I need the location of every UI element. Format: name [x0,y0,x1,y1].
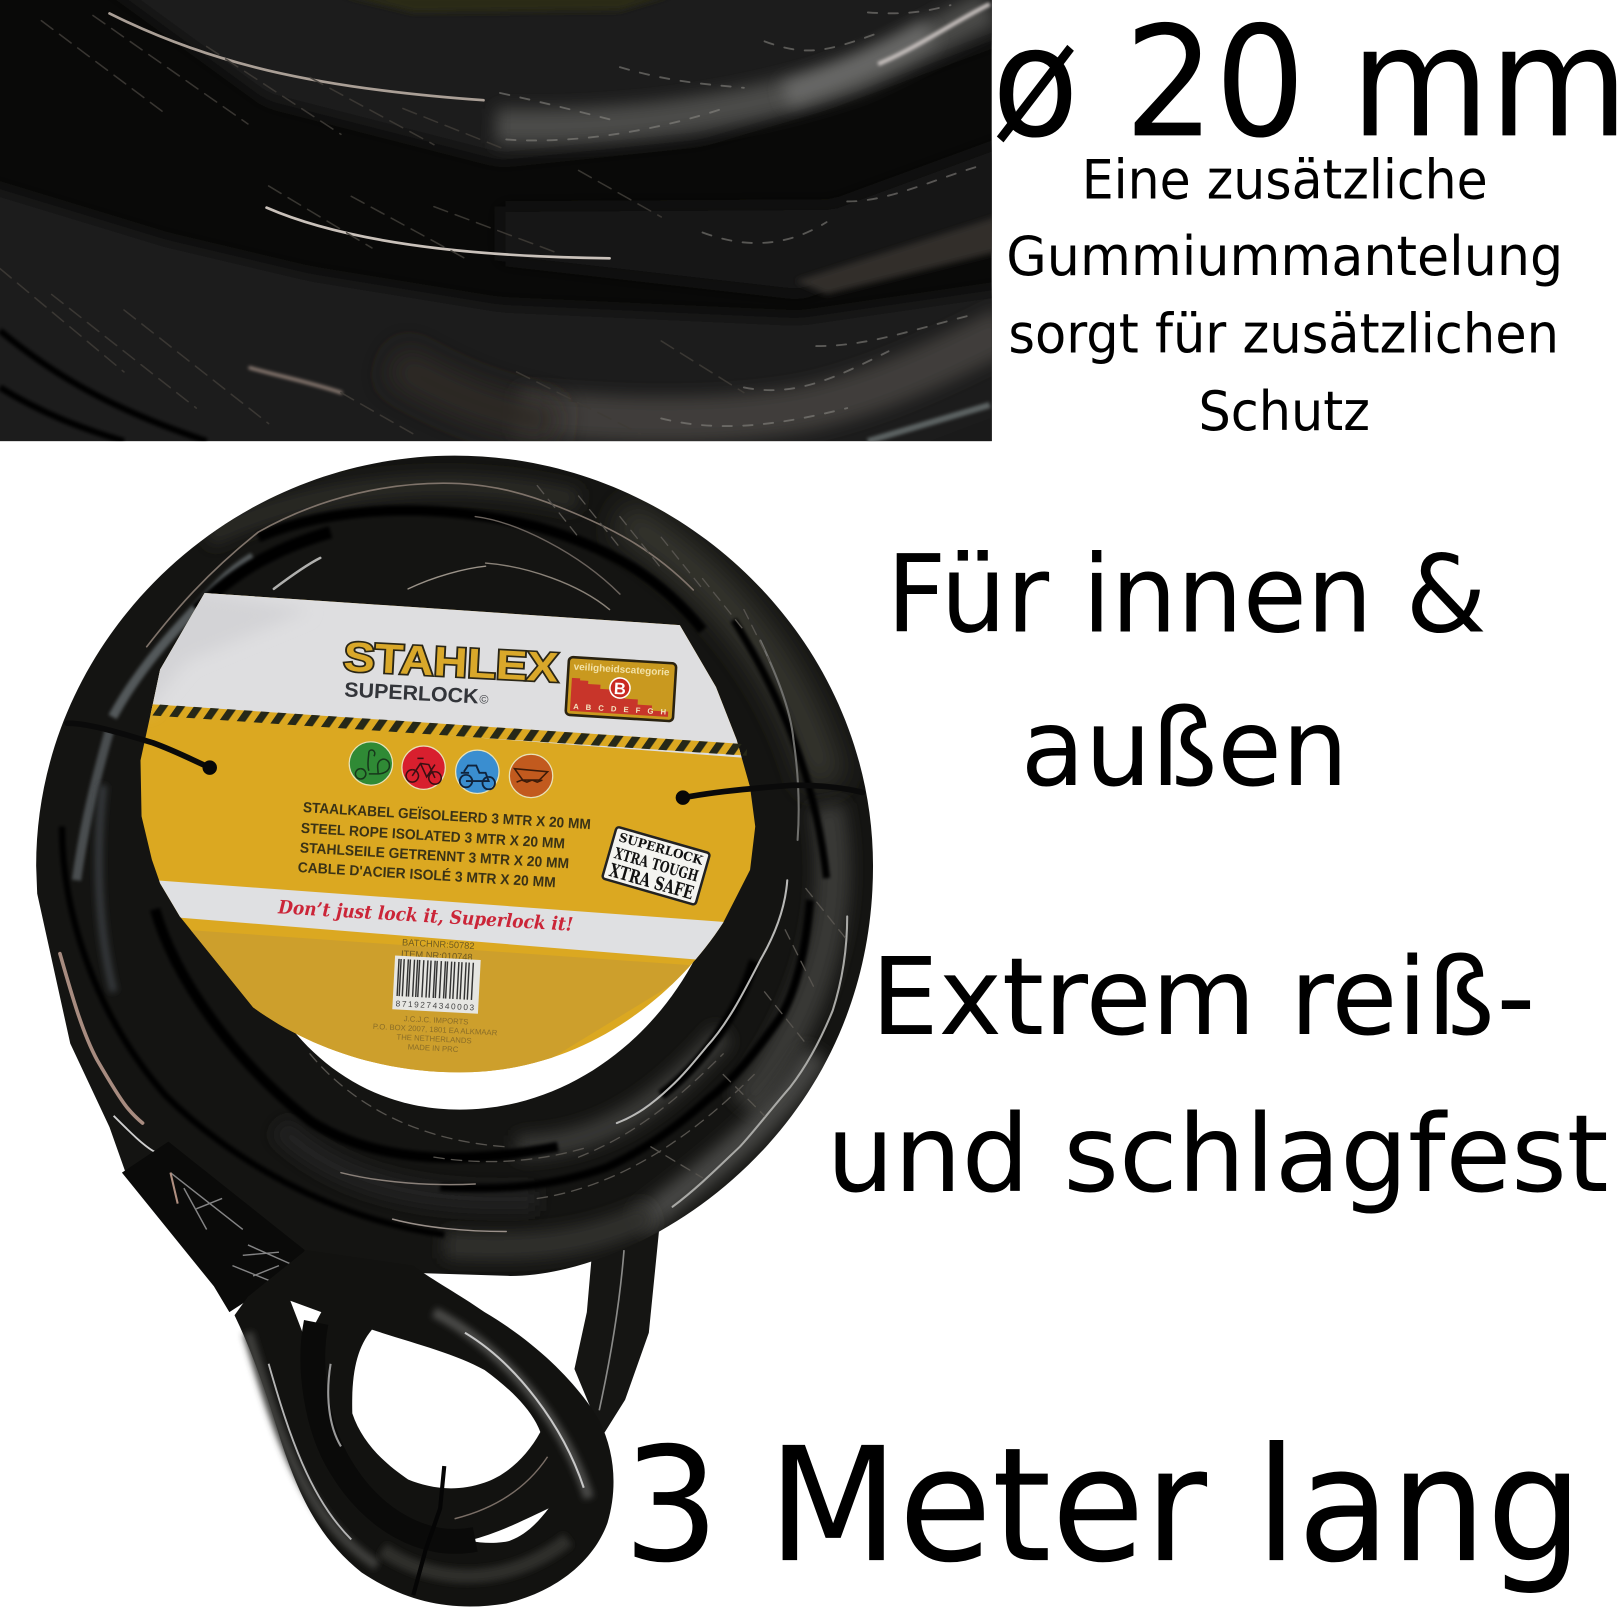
cable: lower loop [235,1250,614,1606]
dark gaps between cable turns [62,510,827,1235]
badge: safety category B: B [613,679,627,699]
text block: rubber sheath description [1006,147,1563,443]
cable tie: left [67,723,217,775]
icons: vehicle categories [349,742,553,798]
text block: rubber sheath description: Eine zusätzliche [1082,147,1488,211]
heading: indoor and outdoor use: Für innen & [886,532,1487,657]
heading: tear and impact resistant: und schlagfest [827,1092,1609,1217]
logo: Stahlex Superlock: SUPERLOCK [344,678,479,708]
highlight: wire strands [0,5,982,434]
badge: safety category B: veiligheidscategorie [573,662,670,679]
batch and item numbers: BATCHNR:50782 [402,937,475,951]
cable: ferrule with tape [122,1142,305,1312]
badge: safety category B: A B C D E F G H [573,702,667,717]
sticker: Superlock Xtra Tough Xtra Safe: XTRA TOUGH [612,843,701,886]
batch and item numbers [401,937,475,962]
importer address [373,1014,498,1054]
text block: product description in four languages: STAHLSEILE GETRENNT 3 MTR X 20 MM [299,840,570,872]
text block: product description in four languages: STEEL ROPE ISOLATED 3 MTR X 20 MM [300,821,565,852]
heading: indoor and outdoor use [886,532,1487,811]
text block: product description in four languages [297,799,591,891]
heading: tear and impact resistant [827,935,1609,1217]
cable tie: right [676,785,863,805]
text block: rubber sheath description: sorgt für zusätzlichen [1008,301,1559,365]
sticker: Superlock Xtra Tough Xtra Safe: SUPERLOCK [617,829,706,868]
heading: indoor and outdoor use: außen [1021,686,1348,811]
cable tie: on lower loop [413,1466,444,1595]
logo: Stahlex Superlock [343,634,560,708]
barcode: 8719274340003 [395,999,475,1012]
panel: close-up photo of rubber-coated cable [0,0,1012,465]
cable: tail behind coil [574,1188,663,1436]
sticker: Superlock Xtra Tough Xtra Safe [602,827,710,906]
slogan: Don’t just lock it, Superlock it! [277,897,574,936]
hazard stripe [153,710,747,750]
hole: white crescent under the label [222,827,728,1110]
heading: cable length: 3 Meter lang [623,1414,1583,1598]
photo: coiled steel cable [36,456,873,1606]
importer address: J.C.J.C. IMPORTS [404,1014,469,1027]
logo: Stahlex Superlock: STAHLEX [343,634,560,691]
highlight: coil strands [60,483,847,1232]
cable: main coil [36,456,873,1276]
text block: rubber sheath description: Schutz [1198,379,1370,443]
batch and item numbers: ITEM NR:010748 [401,949,473,962]
text block: product description in four languages: STAALKABEL GEÏSOLEERD 3 MTR X 20 MM [302,799,591,833]
importer address: MADE IN PRC [407,1042,459,1054]
logo: Stahlex Superlock: © [479,693,489,707]
text block: rubber sheath description: Gummiummantelung [1006,224,1563,288]
label: product card [124,579,765,1080]
importer address: THE NETHERLANDS [396,1032,472,1045]
barcode [392,956,481,1014]
heading: tear and impact resistant: Extrem reiß- [871,935,1535,1060]
badge: safety category B [566,657,676,721]
importer address: P.O. BOX 2007, 1801 EA ALKMAAR [373,1022,498,1037]
sticker: Superlock Xtra Tough Xtra Safe: XTRA SAFE [607,860,696,904]
text block: product description in four languages: CABLE D'ACIER ISOLÉ 3 MTR X 20 MM [297,859,556,891]
